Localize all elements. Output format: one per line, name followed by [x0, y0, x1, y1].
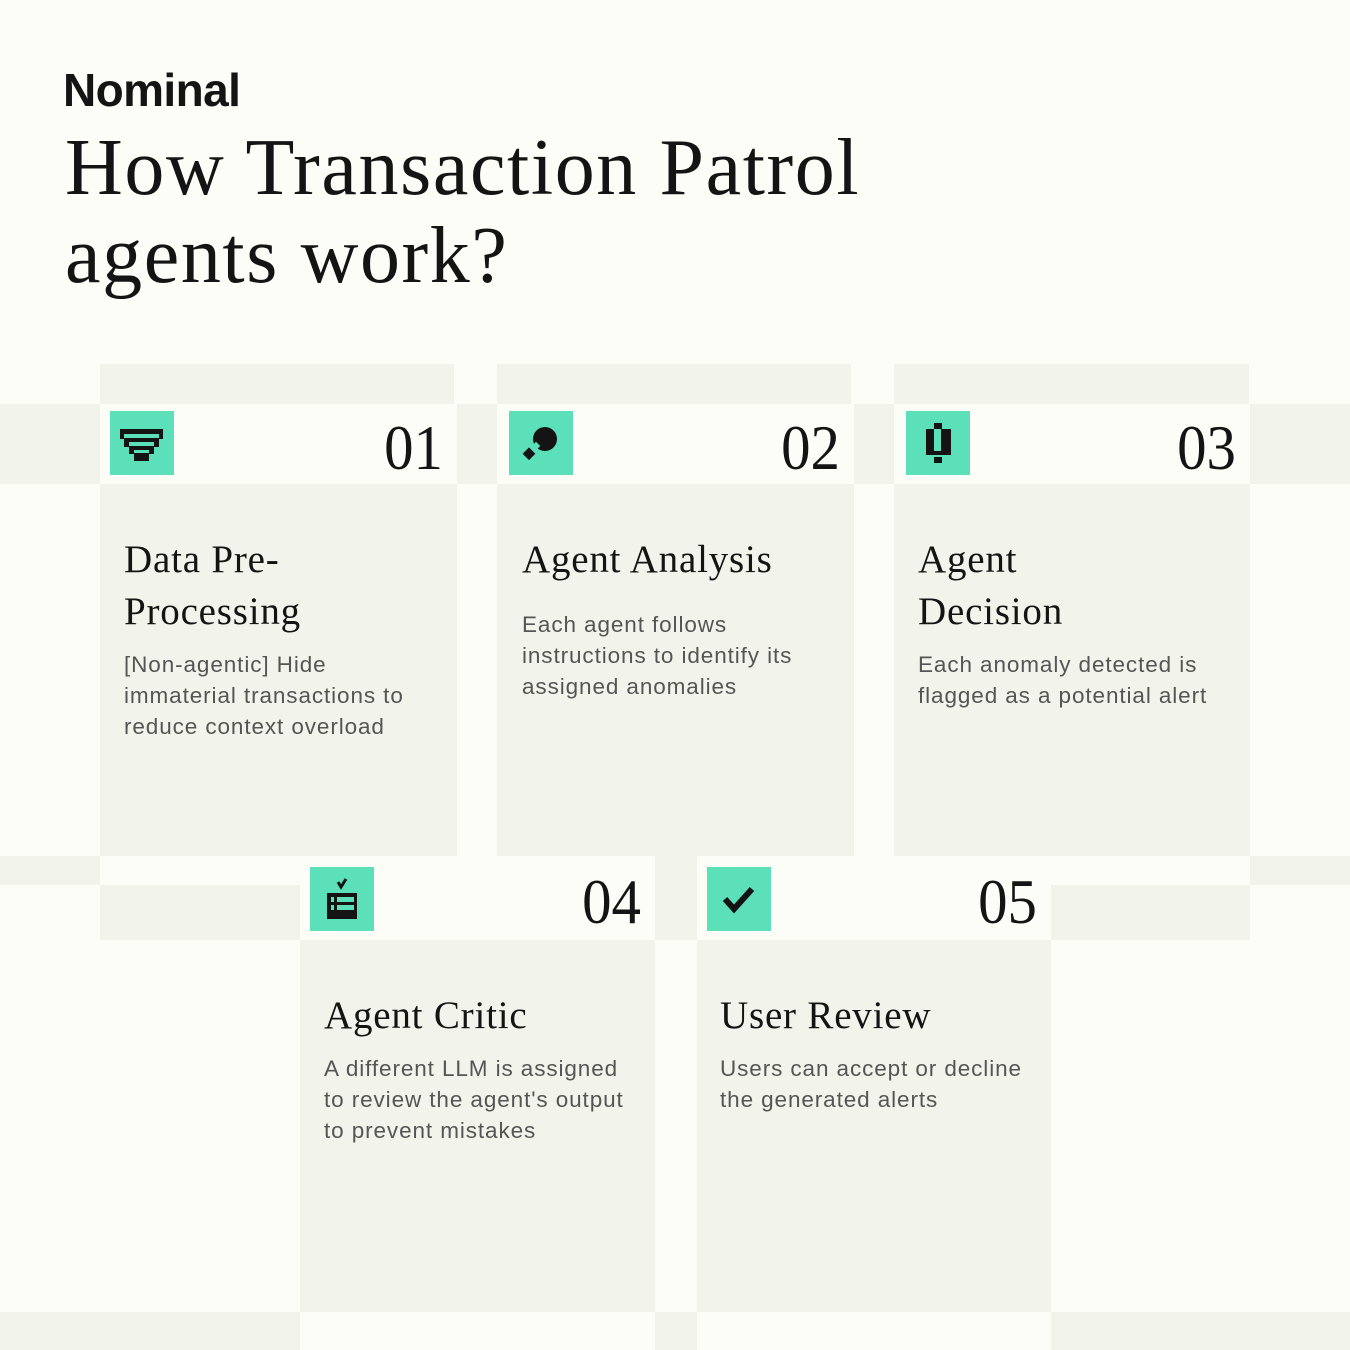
card 04: [300, 866, 655, 1312]
text: [324, 1056, 624, 1143]
number: 01: [384, 412, 443, 483]
heading: Agent: [918, 538, 1017, 581]
text: [720, 1056, 1022, 1112]
number: 03: [1177, 412, 1236, 483]
number: 02: [781, 412, 840, 483]
text: A different LLM is assigned: [324, 1056, 618, 1081]
text: flagged as a potential alert: [918, 683, 1207, 708]
icon: check: [707, 867, 771, 931]
text: reduce context overload: [124, 714, 385, 739]
heading: Agent Critic: [324, 994, 527, 1037]
heading: Decision: [918, 590, 1063, 633]
heading: [124, 538, 301, 633]
text: to review the agent's output: [324, 1087, 624, 1112]
heading: Data Pre-: [124, 538, 280, 581]
card 03: [894, 404, 1250, 856]
text: Each anomaly detected is: [918, 652, 1197, 677]
number: 05: [978, 866, 1037, 937]
heading: User Review: [720, 994, 931, 1037]
text: Each agent follows: [522, 612, 727, 637]
title: [65, 124, 860, 300]
icon: checklist: [310, 867, 374, 931]
number: 04: [582, 866, 641, 937]
icon: filter: [110, 411, 174, 475]
heading: [918, 538, 1063, 633]
text: [918, 652, 1207, 708]
text: to prevent mistakes: [324, 1118, 536, 1143]
text: [124, 652, 404, 739]
text: immaterial transactions to: [124, 683, 404, 708]
card 05: [697, 866, 1051, 1312]
text: Users can accept or decline: [720, 1056, 1022, 1081]
heading: Processing: [124, 590, 301, 633]
icon: search: [509, 411, 573, 475]
card 02: [497, 404, 854, 856]
title: How Transaction Patrol: [65, 124, 860, 212]
heading: Agent Analysis: [522, 538, 773, 581]
icon: alert: [906, 411, 970, 475]
text: [Non-agentic] Hide: [124, 652, 327, 677]
text: assigned anomalies: [522, 674, 737, 699]
text: [522, 612, 792, 699]
brand: Nominal: [63, 64, 240, 116]
text: the generated alerts: [720, 1087, 938, 1112]
text: instructions to identify its: [522, 643, 792, 668]
title: agents work?: [65, 212, 508, 300]
card 01: [100, 404, 457, 856]
